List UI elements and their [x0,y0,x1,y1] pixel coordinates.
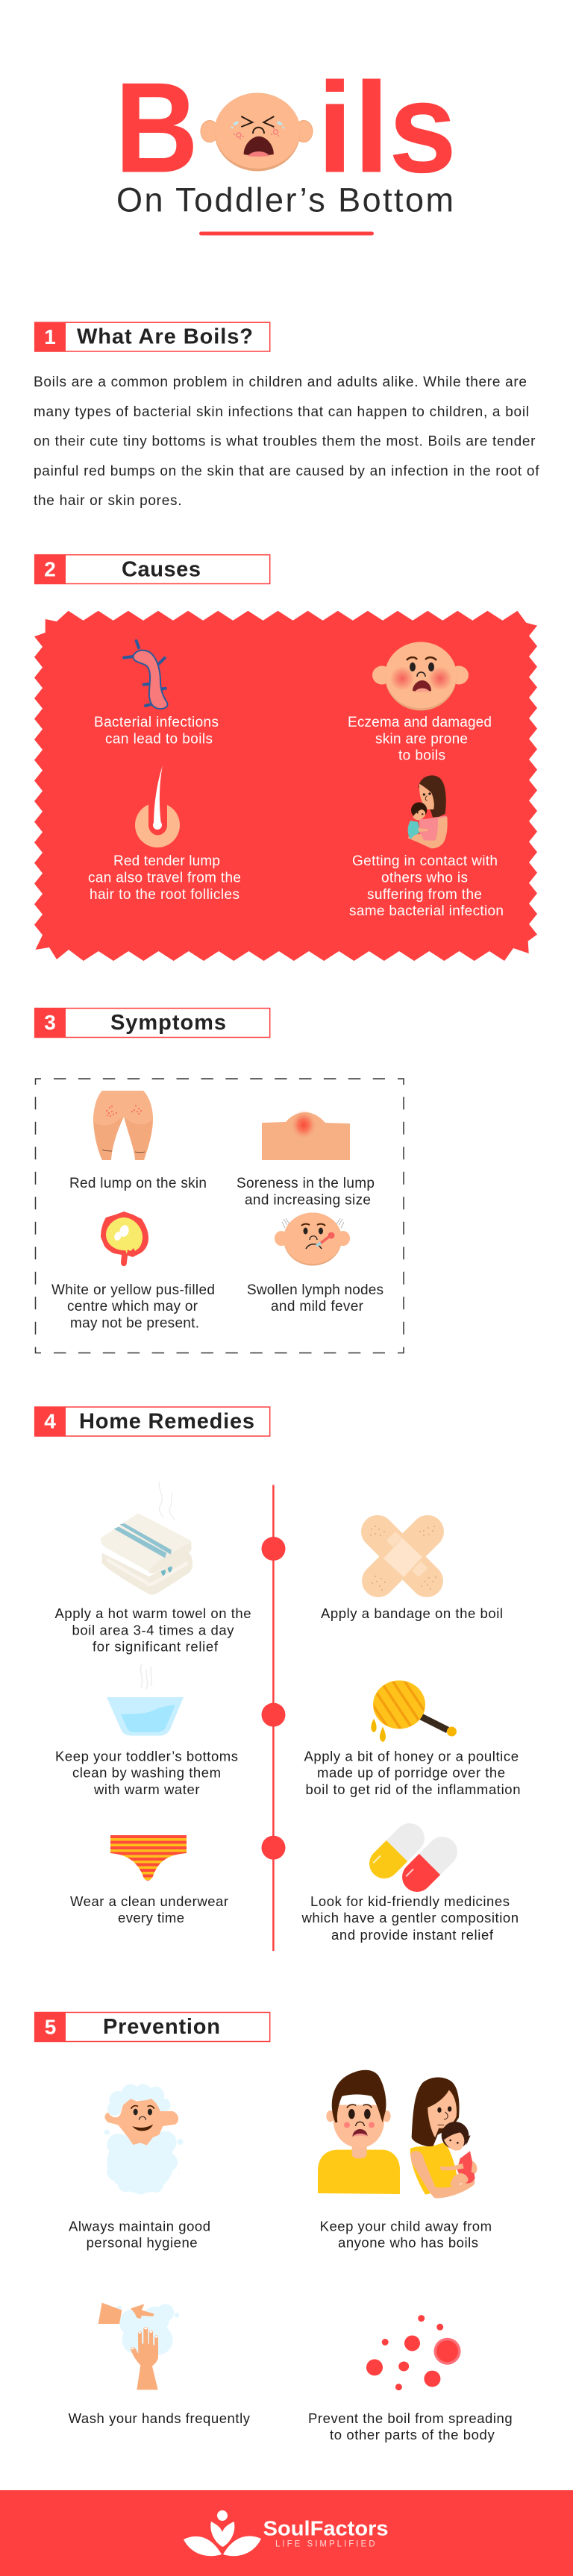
caption: Keep your toddler’s bottoms [55,1749,238,1764]
heading bar 5: Prevention [103,2015,220,2039]
icon: SoulFactors lotus logo [184,2510,261,2556]
icon: sad baby with eczema [372,642,469,710]
section 1: What Are Boils? [34,322,539,509]
heading bar 5 [34,2012,270,2042]
heading: Boils: B [115,56,198,199]
caption [237,1176,375,1209]
heading bar 3 [34,1008,270,1038]
section 4: Home Remedies [34,1407,521,1951]
heading: Boils: l [354,55,389,199]
icon: spreading red spots [366,2315,461,2390]
caption: Keep your child away from [320,2218,492,2234]
heading bar 4 [34,1407,270,1437]
caption [320,2218,492,2250]
section 5: Prevention [34,2012,513,2442]
intro paragraph: the hair or skin pores. [34,493,182,509]
icon: folded towels with steam [101,1482,192,1595]
panel: causes zigzag background [34,611,537,961]
caption: Swollen lymph nodes [247,1282,383,1298]
caption: hair to the root follicles [90,887,239,903]
caption: and increasing size [245,1193,371,1209]
caption [308,2410,513,2442]
caption: anyone who has boils [338,2235,478,2250]
icon: buttocks with rash [93,1091,153,1160]
caption [70,1893,228,1925]
tagline: LIFE SIMPLIFIED [275,2540,375,2549]
caption: Soreness in the lump [237,1176,375,1191]
remedy: honey or poultice [304,1674,521,1797]
cause: red tender lump [88,765,241,903]
panel: symptoms dashed box [36,1079,404,1353]
caption [247,1282,383,1314]
symptom: red lump on the skin [69,1091,207,1191]
caption: Look for kid-friendly medicines [310,1893,510,1909]
caption: Apply a bandage on the boil [321,1605,503,1621]
caption: can also travel from the [88,871,241,886]
caption [55,1605,251,1655]
caption: Getting in contact with [352,853,498,869]
caption: Bacterial infections [94,715,219,730]
icon: baby in soap foam [104,2084,184,2195]
caption: every time [118,1910,184,1925]
caption: Wear a clean underwear [70,1893,228,1909]
icon: man with boils and mother with child [318,2070,478,2199]
caption [348,715,492,764]
caption: skin are prone [375,731,468,747]
symptom: soreness [237,1110,375,1209]
caption: may not be present. [70,1316,199,1331]
caption: and provide instant relief [331,1927,494,1943]
heading bar 2: 2 [44,558,56,580]
intro paragraph: many types of bacterial skin infections that can happen to children, a boil [34,404,529,420]
caption: others who is [381,871,468,886]
caption: can lead to boils [105,731,213,747]
caption: boil area 3-4 times a day [72,1623,234,1638]
caption: to other parts of the body [330,2427,495,2442]
icon: honey dipper [371,1680,457,1743]
caption: Eczema and damaged [348,715,492,730]
heading bar 4: Home Remedies [79,1410,254,1434]
intro paragraph: on their cute tiny bottoms is what troubles them the most. Boils are tender [34,434,536,449]
caption [51,1282,215,1331]
section 3: Symptoms [34,1008,404,1353]
caption: for significant relief [93,1639,219,1655]
caption: suffering from the [367,887,482,903]
caption: White or yellow pus-filled [51,1282,215,1298]
caption [94,715,219,747]
prevention: stop spreading [308,2315,513,2442]
heading bar 1: What Are Boils? [77,325,253,349]
caption [88,853,241,903]
caption: Wash your hands frequently [69,2410,251,2426]
caption: boil to get rid of the inflammation [306,1781,521,1797]
symptom: pus-filled centre [51,1212,215,1331]
caption: with warm water [93,1781,200,1797]
intro paragraph: Boils are a common problem in children and adults alike. While there are [34,375,527,390]
icon: pus-filled boil [101,1212,148,1266]
remedy: bandage [321,1526,503,1621]
heading bar 4: 4 [44,1410,56,1432]
heading bar 2: Causes [122,558,201,582]
caption [349,853,504,919]
caption: centre which may or [67,1299,198,1314]
caption: Always maintain good [69,2218,210,2234]
caption [301,1893,519,1943]
symptom: swollen lymph nodes [247,1213,383,1314]
remedy: warm water [55,1664,238,1797]
remedy: clean underwear [70,1835,228,1925]
prevention: hygiene [69,2084,210,2250]
cause: contact with others [349,775,504,919]
prevention: keep child away [318,2070,492,2250]
caption [69,2218,210,2250]
caption: to boils [398,748,445,764]
caption: clean by washing them [72,1765,221,1781]
caption: Apply a bit of honey or a poultice [304,1749,519,1764]
icon: bowl of warm water [107,1664,184,1736]
icon: bacteria [124,641,167,709]
heading bar 1: 1 [44,325,56,348]
heading: Boils: i [316,55,353,199]
caption: made up of porridge over the [317,1765,505,1781]
icon: striped underwear [110,1835,187,1883]
title underline [199,231,374,236]
icon: baby with fever [275,1213,350,1265]
caption: Prevent the boil from spreading [308,2410,513,2426]
caption [55,1749,238,1797]
footer [0,2490,573,2576]
caption: Red tender lump [113,853,220,869]
caption [304,1749,521,1797]
icon: hair follicle [135,765,180,847]
heading bar 3: Symptoms [110,1011,226,1035]
heading bar 5: 5 [45,2016,56,2038]
caption: which have a gentler composition [301,1910,519,1925]
remedy: warm towel [55,1482,251,1655]
icon: capsules [363,1817,463,1898]
brand name: SoulFactors [263,2517,389,2539]
heading bar 3: 3 [44,1011,56,1034]
remedy: medicines [301,1817,519,1943]
cause: bacterial infections [94,641,219,747]
caption: personal hygiene [87,2235,198,2250]
timeline [261,1485,285,1951]
caption: Red lump on the skin [69,1176,207,1191]
icon: skin lump [262,1110,350,1160]
caption: Apply a hot warm towel on the [55,1605,251,1621]
caption: and mild fever [271,1299,364,1314]
icon: soapy hands [98,2303,179,2389]
title block [115,55,457,235]
caption: same bacterial infection [349,903,504,919]
prevention: wash hands [69,2303,251,2426]
intro paragraph [34,375,539,509]
intro paragraph: painful red bumps on the skin that are caused by an infection in the root of [34,464,539,479]
heading bar 2 [34,554,270,584]
subtitle: On Toddler’s Bottom [116,181,454,219]
heading bar 1 [34,322,270,352]
heading: Boils [115,55,457,199]
section 2: Causes [34,554,537,961]
icon: mother and child [408,775,448,848]
icon: crossed bandages [370,1526,436,1591]
heading: Boils: s [389,56,457,199]
cause: eczema [348,642,492,764]
icon: crying baby face [201,93,313,172]
footer band [0,2490,573,2576]
